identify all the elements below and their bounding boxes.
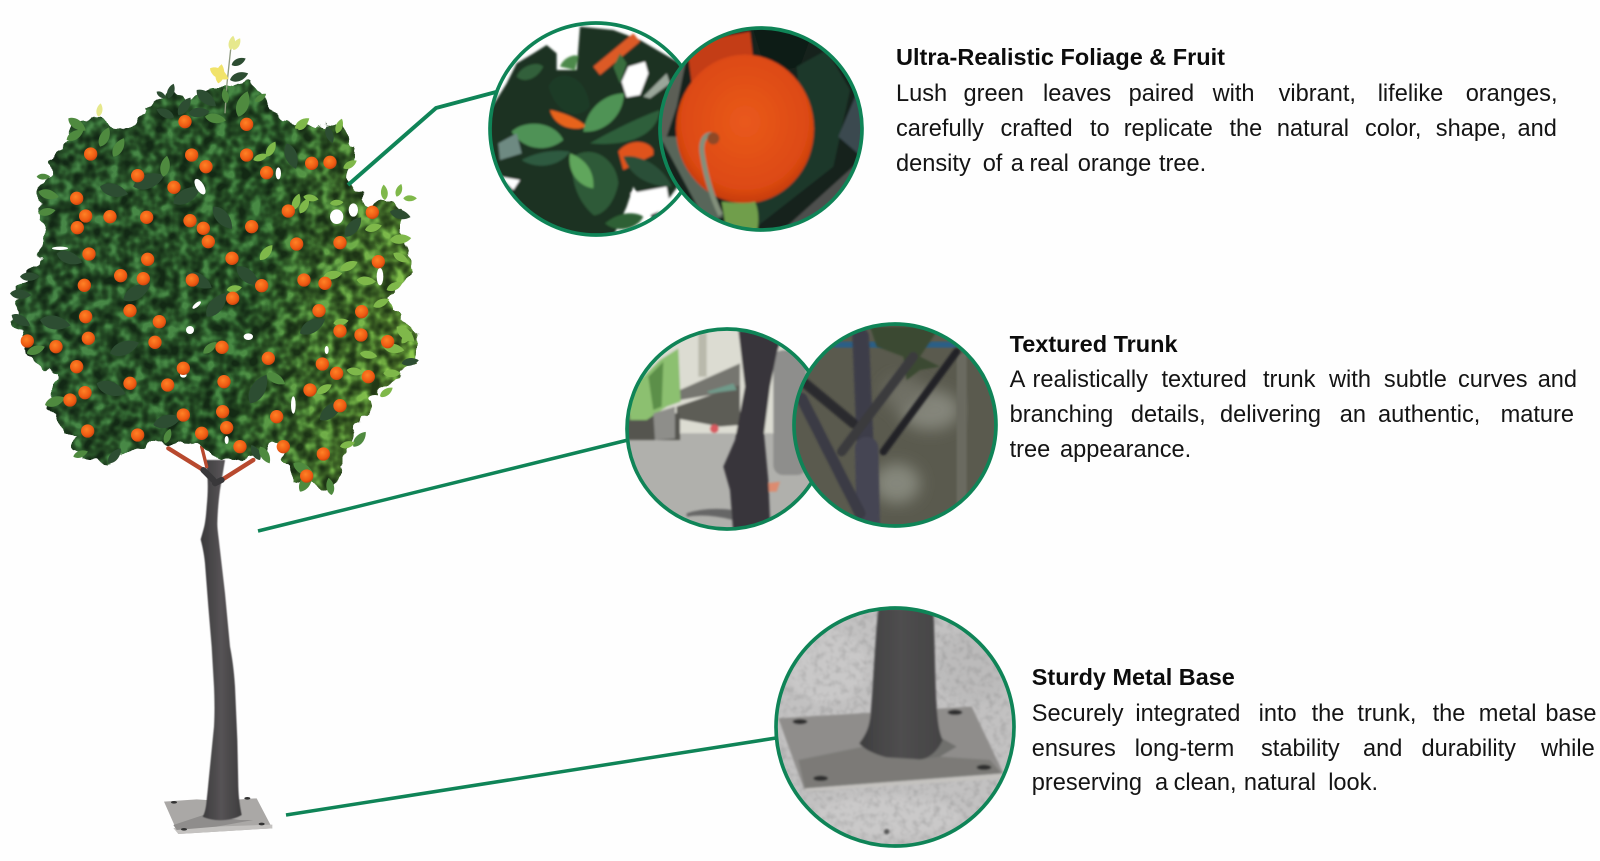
foliage mass <box>17 80 417 490</box>
text block: base <box>1032 664 1597 796</box>
body: foliage description: tree. <box>1159 151 1206 177</box>
body: foliage description: natural <box>1277 116 1356 142</box>
photo: branching close-up <box>794 324 996 527</box>
body: trunk description: branching <box>1010 402 1120 428</box>
body: base description: while <box>1540 736 1595 762</box>
body: trunk description: curves <box>1458 367 1534 393</box>
body: base description: stability <box>1261 736 1346 762</box>
connector line: foliage <box>348 92 496 185</box>
body: base description: into <box>1259 701 1303 727</box>
heading: Textured Trunk: Textured Trunk <box>1010 331 1179 357</box>
body: trunk description <box>1010 367 1577 463</box>
text block: foliage and fruit <box>896 44 1558 177</box>
body: base description: long-term <box>1135 736 1241 762</box>
body: base description: Securely <box>1032 701 1130 727</box>
body: foliage description: the <box>1230 116 1269 142</box>
body: base description: clean, <box>1174 770 1243 796</box>
connector line: trunk <box>258 440 628 531</box>
body: base description: the <box>1433 701 1472 727</box>
orange tree illustration <box>9 35 419 834</box>
body: trunk description: A <box>1010 367 1031 393</box>
body: trunk description: textured <box>1162 367 1253 393</box>
body: trunk description: trunk <box>1263 367 1322 393</box>
body: trunk description: subtle <box>1384 367 1453 393</box>
photo circle: metal base <box>773 607 1017 850</box>
body: foliage description: a <box>1011 151 1030 177</box>
body: trunk description: appearance. <box>1060 437 1191 463</box>
body: base description: trunk, <box>1357 701 1423 727</box>
body: foliage description: paired <box>1129 81 1201 107</box>
body: trunk description: authentic, <box>1378 402 1487 428</box>
body: foliage description: lifelike <box>1378 81 1450 107</box>
photo circles: trunk <box>627 324 996 533</box>
body: foliage description <box>896 81 1558 177</box>
connector line: base <box>286 738 776 815</box>
body: trunk description: delivering <box>1220 402 1328 428</box>
tree trunk and base plate <box>164 460 272 834</box>
body: foliage description: real <box>1030 151 1075 177</box>
body: trunk description: an <box>1340 402 1373 428</box>
body: foliage description: oranges, <box>1466 81 1558 107</box>
body: base description: natural <box>1244 770 1323 796</box>
body: foliage description: with <box>1212 81 1261 107</box>
tree canopy with foliage and oranges <box>9 35 419 496</box>
body: base description: look. <box>1328 770 1378 796</box>
body: base description: preserving <box>1032 770 1149 796</box>
body: base description: durability <box>1422 736 1522 762</box>
body: foliage description: vibrant, <box>1279 81 1363 107</box>
heading: Ultra-Realistic Foliage & Fruit: Ultra-Realistic Foliage & Fruit <box>896 44 1225 70</box>
body: trunk description: with <box>1328 367 1378 393</box>
body: foliage description: of <box>983 151 1009 177</box>
body: foliage description: replicate <box>1124 116 1219 142</box>
photo: orange close-up <box>657 27 867 233</box>
body: foliage description: color, <box>1365 116 1428 142</box>
body: foliage description: leaves <box>1043 81 1118 107</box>
body: foliage description: and <box>1518 116 1557 142</box>
body: base description: and <box>1363 736 1409 762</box>
body: base description: a <box>1155 770 1175 796</box>
body: foliage description: green <box>964 81 1030 107</box>
body: foliage description: density <box>896 151 977 177</box>
body: foliage description: Lush <box>896 81 954 107</box>
gaps in foliage <box>52 167 383 444</box>
photo circles: foliage and fruit <box>487 20 867 240</box>
photo: trunk close-up <box>627 327 830 533</box>
individual leaves <box>9 35 419 496</box>
body: base description: ensures <box>1032 736 1122 762</box>
text block: trunk <box>1010 331 1577 463</box>
body: trunk description: and <box>1538 367 1577 393</box>
body: base description: metal <box>1479 701 1543 727</box>
body: trunk description: tree <box>1010 437 1057 463</box>
body: foliage description: shape, <box>1436 116 1513 142</box>
body: foliage description: orange <box>1078 151 1158 177</box>
body: base description: the <box>1312 701 1351 727</box>
body: foliage description: crafted <box>1000 116 1079 142</box>
body: base description: base <box>1545 701 1597 727</box>
body: trunk description: details, <box>1131 402 1212 428</box>
red branches <box>168 447 253 483</box>
body: foliage description: to <box>1090 116 1116 142</box>
body: foliage description: carefully <box>896 116 990 142</box>
photo: leaves close-up <box>488 21 682 237</box>
oranges <box>21 115 394 483</box>
body: trunk description: realistically <box>1032 367 1154 393</box>
body: trunk description: mature <box>1501 402 1574 428</box>
heading: Sturdy Metal Base: Sturdy Metal Base <box>1032 664 1235 690</box>
body: base description <box>1032 701 1597 796</box>
body: base description: integrated <box>1135 701 1247 727</box>
